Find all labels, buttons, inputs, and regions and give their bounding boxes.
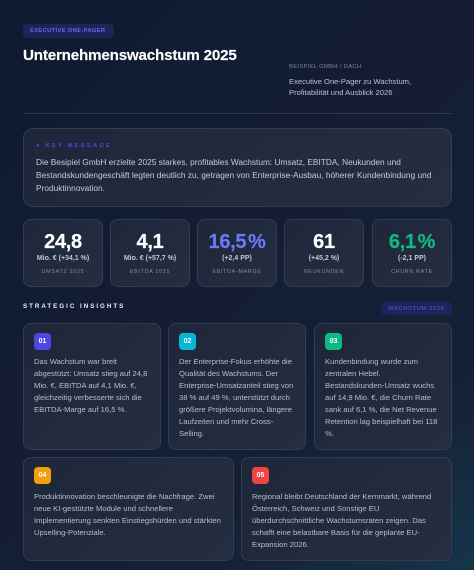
insight card 03: %. <box>325 429 334 438</box>
KPI: Churn Rate: 6,1 % <box>389 231 435 253</box>
insight card 01: EBITDA-Marge auf 16,5 %. <box>34 405 127 414</box>
KPI: EBITDA-Marge <box>197 219 277 287</box>
badge 04 <box>34 467 51 484</box>
key message text <box>36 157 431 193</box>
insight card 03: Kundenbindung wurde zum <box>325 357 418 366</box>
badge 01 <box>34 333 51 350</box>
title: Unternehmenswachstum 2025 <box>23 47 237 64</box>
insight card 04: neue KI-gestützte Module und schnellere <box>34 504 173 513</box>
KPI: Umsatz: UMSATZ 2025 <box>42 269 84 275</box>
header meta <box>289 64 411 97</box>
KPI: EBITDA <box>110 219 190 287</box>
KPI: EBITDA: Mio. € (+57,7 %) <box>124 255 176 262</box>
KPI: Umsatz <box>23 219 103 287</box>
insight card 02: Qualität des Wachstums. Der <box>179 369 278 378</box>
insight card 02: 38 % auf 49 %, unterstützt durch <box>179 393 290 402</box>
insight card 05 <box>241 457 452 561</box>
section tag: WACHSTUM 2025 <box>388 306 444 312</box>
badge 01: 01 <box>39 338 46 345</box>
KPI: EBITDA-Marge: (+2,4 PP) <box>222 255 252 262</box>
badge 02 <box>179 333 196 350</box>
insight card 04: Produktinnovation beschleunigte die Nachfrage. Zwei <box>34 492 215 501</box>
KPI: EBITDA-Marge: EBITDA-MARGE <box>212 269 262 275</box>
insight card 03: zentralen Hebel. <box>325 369 381 378</box>
key message text: Die Besipiel GmbH erzielte 2025 starkes, profitables Wachstum: Umsatz, EBITDA, Neukunden und <box>36 157 401 167</box>
badge 03 <box>325 333 342 350</box>
insight card 05: Österreich, Schweiz und Sonstige EU <box>252 504 379 513</box>
insight card 01 <box>23 323 161 450</box>
insight card 05: schafft eine belastbare Basis für die geplante EU- <box>252 528 420 537</box>
KPI: Neukunden: NEUKUNDEN <box>304 269 344 275</box>
KPI: Neukunden <box>284 219 364 287</box>
KPI: EBITDA: EBITDA 2025 <box>130 269 170 275</box>
header tag <box>23 24 114 38</box>
header meta: Executive One-Pager zu Wachstum, <box>289 77 411 86</box>
insight card 05: Expansion 2026. <box>252 540 309 549</box>
insight card 02 <box>168 323 306 450</box>
header tag: EXECUTIVE ONE-PAGER <box>30 28 105 34</box>
insight card 02: Laufzeiten und mehr Cross- <box>179 417 273 426</box>
insight card 01: Mio. €, EBITDA auf 4,1 Mio. €, <box>34 381 137 390</box>
badge 05: 05 <box>257 472 264 479</box>
badge 05 <box>252 467 269 484</box>
KPI: Churn Rate: CHURN RATE <box>391 269 433 275</box>
insight card 03: Retention lag beispielhaft bei 118 <box>325 417 437 426</box>
insight card 04: Upselling-Potenziale. <box>34 528 106 537</box>
badge 02: 02 <box>184 338 191 345</box>
insight card 03: sank auf 6,1 %, die Net Revenue <box>325 405 437 414</box>
badge 03: 03 <box>330 338 337 345</box>
insight card 02: größere Projektvolumina, längere <box>179 405 292 414</box>
KPI: EBITDA-Marge: 16,5 % <box>209 231 265 253</box>
insight card 01: gleichzeitig verbesserte sich die <box>34 393 142 402</box>
KPI: Umsatz: 24,8 <box>44 231 82 253</box>
insight card 05: überdurchschnittliche Wachstumsraten zeigen. Das <box>252 516 426 525</box>
KPI: Churn Rate: (-2,1 PP) <box>398 255 426 262</box>
insight card 04: Implementierung senkten Einstiegshürden und stärkten <box>34 516 221 525</box>
KPI: Churn Rate <box>372 219 452 287</box>
section tag <box>381 302 452 315</box>
insight card 02: Der Enterprise-Fokus erhöhte die <box>179 357 292 366</box>
insight card 02: Selling. <box>179 429 204 438</box>
insight card 05: Regional bleibt Deutschland der Kernmarkt, während <box>252 492 431 501</box>
insight card 03 <box>314 323 452 450</box>
insight card 01: abgestützt: Umsatz stieg auf 24,8 <box>34 369 147 378</box>
KPI: Neukunden: 61 <box>313 231 335 253</box>
insight card 04 <box>23 457 234 561</box>
key message text: Bestandskundengeschäft legten deutlich zu, getragen von Enterprise-Ausbau, höherer Kundenbindung und <box>36 170 431 180</box>
KPI: Umsatz: Mio. € (+34,1 %) <box>37 255 89 262</box>
insight card 03: auf 14,9 Mio. €, die Churn Rate <box>325 393 431 402</box>
key message label: ● KEY MESSAGE <box>36 143 112 149</box>
KPI: Neukunden: (+45,2 %) <box>309 255 339 262</box>
header meta: BEISPIEL GMBH / DACH <box>289 64 361 70</box>
header meta: Profitabilität und Ausblick 2026 <box>289 88 392 97</box>
KPI: EBITDA: 4,1 <box>137 231 163 253</box>
section heading: STRATEGIC INSIGHTS <box>23 303 125 310</box>
key message text: Produktinnovation. <box>36 183 105 193</box>
panel: key message <box>23 128 452 207</box>
insight card 02: Enterprise-Umsatzanteil stieg von <box>179 381 293 390</box>
insight card 03: Bestandskunden-Umsatz wuchs <box>325 381 434 390</box>
badge 04: 04 <box>39 472 46 479</box>
insight card 01: Das Wachstum war breit <box>34 357 117 366</box>
